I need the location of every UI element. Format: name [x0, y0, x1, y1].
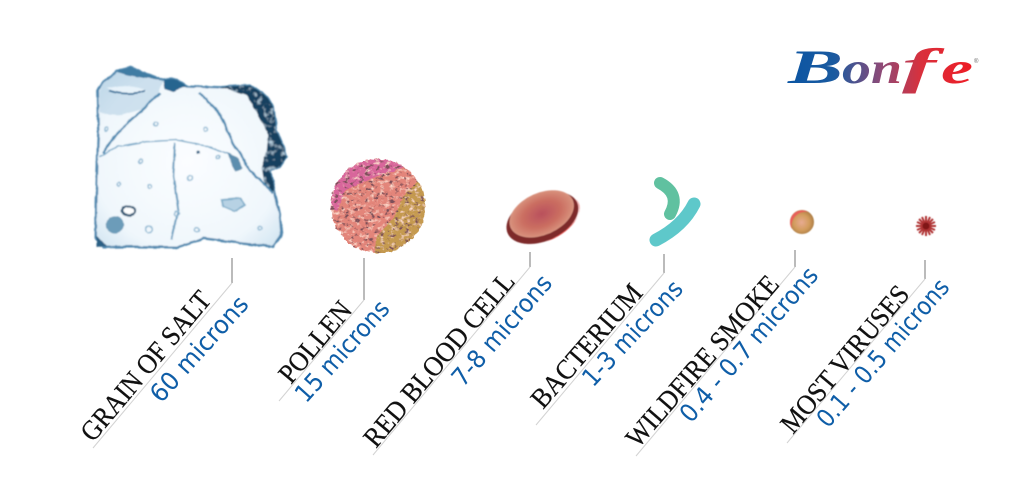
- logo: Bonfe: f: [902, 38, 945, 94]
- image: pollen grain: [331, 159, 425, 253]
- image: wildfire smoke particle: [790, 210, 814, 234]
- label: red blood cell: RED BLOOD CELL: [358, 267, 521, 453]
- logo: Bonfe: [786, 38, 979, 94]
- image: virus: [916, 216, 936, 236]
- label: pollen: [273, 258, 395, 408]
- image: grain of salt crystal: [96, 67, 287, 247]
- logo: Bonfe: B: [786, 41, 843, 94]
- label: pollen: 15 microns: [289, 294, 395, 408]
- label: most viruses: 0.1 - 0.5 microns: [811, 273, 955, 433]
- label: bacterium: [525, 254, 689, 425]
- label: pollen: POLLEN: [273, 295, 359, 389]
- image: bacterium: [656, 183, 694, 240]
- logo: Bonfe: ®: [974, 58, 979, 65]
- image: red blood cell: [498, 179, 588, 255]
- label: wildfire smoke: WILDFIRE SMOKE: [620, 269, 786, 454]
- label: bacterium: 1-3 microns: [576, 274, 689, 392]
- logo: Bonfe: e: [941, 44, 973, 93]
- logo: Bonfe: n: [871, 44, 902, 93]
- logo: Bonfe: o: [842, 44, 871, 93]
- label: grain of salt: 60 microns: [144, 290, 254, 408]
- label: red blood cell: 7-8 microns: [446, 269, 558, 392]
- label: wildfire smoke: 0.4 - 0.7 microns: [674, 261, 824, 428]
- label: grain of salt: GRAIN OF SALT: [75, 285, 218, 447]
- label: bacterium: BACTERIUM: [525, 278, 649, 415]
- label: most viruses: MOST VIRUSES: [775, 279, 916, 439]
